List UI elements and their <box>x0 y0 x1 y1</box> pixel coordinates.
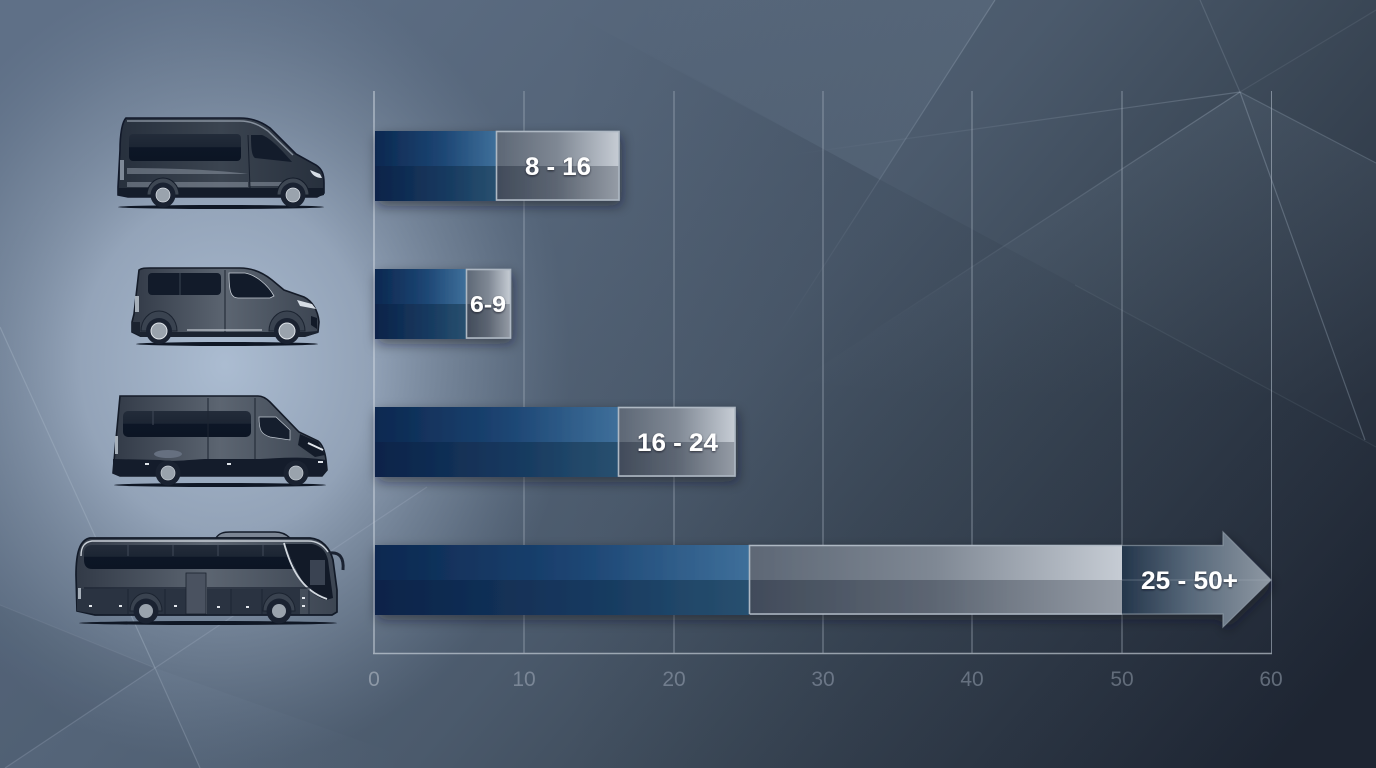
icon: coach bus <box>76 532 343 625</box>
bar: 6-9: 6-9 <box>470 291 506 317</box>
bar: 16 - 24: 16 - 24 <box>637 429 718 457</box>
axis tick labels: 10 <box>512 668 536 691</box>
bar: 8 - 16 <box>375 131 619 201</box>
axis tick labels: 40 <box>960 668 984 691</box>
bar: 6-9 <box>375 269 510 339</box>
axis tick labels: 30 <box>811 668 835 691</box>
axis tick labels <box>368 668 1283 691</box>
axis tick labels: 60 <box>1259 668 1283 691</box>
icon: high-roof minibus <box>118 118 324 209</box>
bar: 25 - 50+ with arrow <box>375 532 1271 627</box>
bar: 8 - 16: 8 - 16 <box>525 153 591 181</box>
axis tick labels: 0 <box>368 668 380 691</box>
arrow head <box>1122 532 1271 627</box>
icon: large minibus <box>113 396 327 487</box>
bar: 25 - 50+ with arrow: 25 - 50+ <box>1141 567 1238 595</box>
axis tick labels: 50 <box>1110 668 1134 691</box>
icon: passenger van <box>132 268 319 346</box>
chart axes and grid <box>373 91 1272 654</box>
bar: 16 - 24 <box>375 407 735 477</box>
axis tick labels: 20 <box>662 668 686 691</box>
